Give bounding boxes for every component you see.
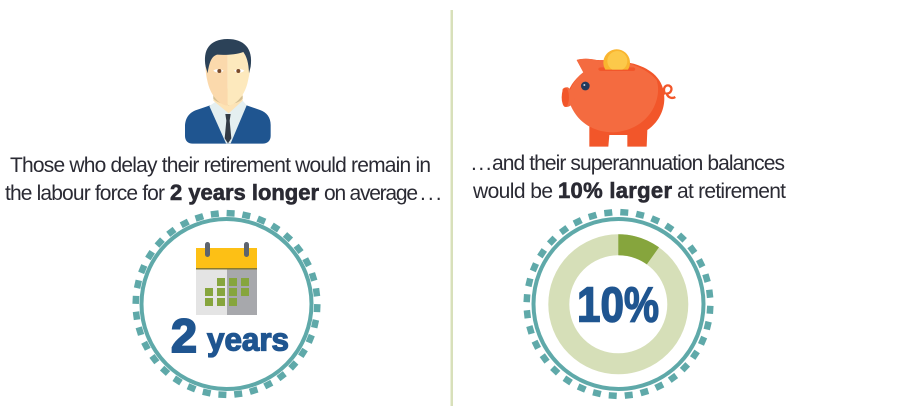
value: 2 years: years [207, 322, 289, 358]
panel divider [450, 10, 453, 406]
text: delay statement: on average [324, 182, 418, 205]
text: balance statement: ... [471, 152, 492, 175]
gear ring [132, 210, 321, 398]
text: balance statement: 10% larger [558, 178, 672, 203]
gear ring [523, 209, 714, 399]
text: delay statement: the labour force for [5, 182, 165, 205]
icon: man in suit [185, 39, 271, 144]
text: balance statement: would be [472, 180, 553, 203]
icon: calendar [196, 242, 257, 315]
value: 10%: % [624, 278, 659, 332]
text: balance statement: and their superannuation balances [492, 152, 785, 175]
text: delay statement: ... [420, 182, 442, 205]
badge: 2 years [132, 210, 321, 398]
text: delay statement: Those who delay their retirement would remain in [10, 154, 431, 177]
value: 10%: 10 [577, 278, 624, 332]
text: balance statement [471, 152, 786, 203]
text: delay statement [5, 154, 442, 205]
text: balance statement: at retirement [677, 180, 786, 203]
donut chart: 10 percent [559, 234, 678, 364]
badge: 10% [523, 209, 714, 399]
icon: piggy bank [562, 49, 675, 147]
value: 2 years [171, 309, 289, 362]
value: 10% [577, 278, 659, 332]
panel: delayed retirement [5, 39, 442, 398]
panel: larger balances [471, 49, 786, 399]
value: 2 years: 2 [171, 309, 197, 362]
text: delay statement: 2 years longer [170, 180, 319, 205]
